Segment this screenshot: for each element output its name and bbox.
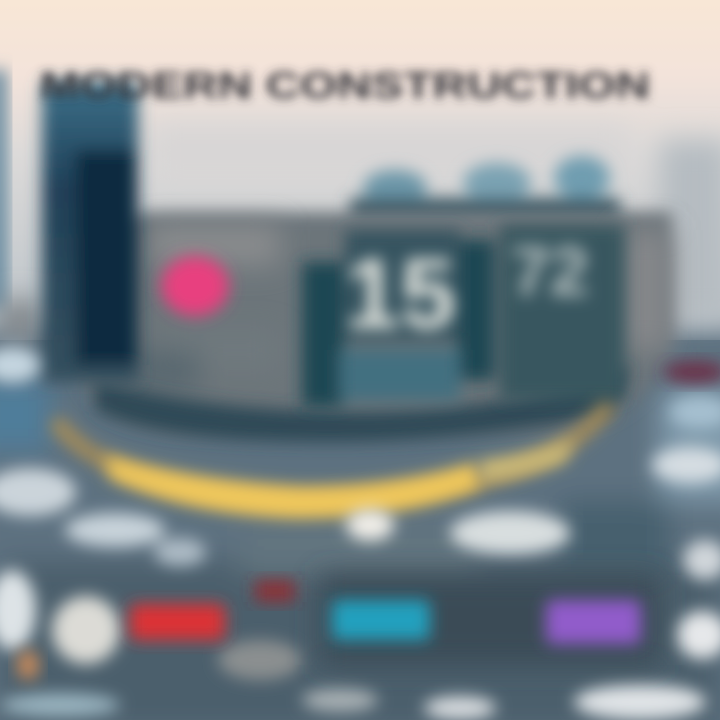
orange accent [17, 650, 39, 680]
dark bottom panel [320, 575, 660, 665]
rooftop domes [350, 156, 620, 222]
panel mottling [100, 225, 670, 390]
maroon accent [663, 361, 720, 383]
pink circle icon [161, 256, 229, 316]
yellow band outer arc [55, 405, 610, 500]
central dark columns [302, 225, 625, 407]
light blobs [0, 347, 720, 720]
right value: 72 [511, 232, 589, 310]
yellow band [105, 455, 480, 518]
left edge tower [0, 70, 6, 310]
teal label [332, 600, 430, 640]
purple label [546, 600, 641, 644]
red label [130, 604, 225, 640]
lower city background [0, 330, 720, 720]
main panel [80, 212, 672, 432]
background sky [0, 0, 720, 340]
band end [480, 438, 575, 482]
distant skyline [0, 125, 720, 340]
white circle icon [52, 596, 120, 664]
title: MODERN CONSTRUCTION [40, 65, 650, 106]
panel lower shade [95, 365, 630, 442]
red accent [255, 580, 295, 602]
left tower [42, 82, 138, 382]
big number: 15 [344, 238, 456, 350]
